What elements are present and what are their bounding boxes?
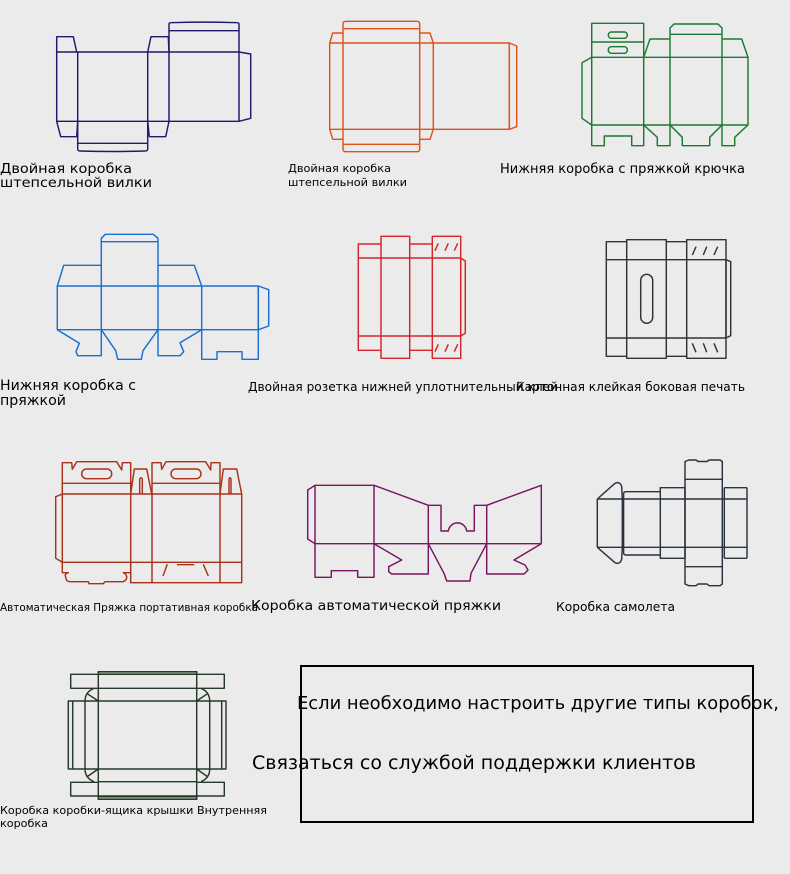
caption: lid-and-base box: Коробка коробки-ящика крышки Внутренняя [0,805,267,817]
caption: buckle bottom box: пряжкой [0,393,66,409]
diagram: orange double plug box [330,21,517,152]
contact message line 1: Если необходимо настроить другие типы коробок, [297,694,779,714]
caption: double plug box 2: Двойная коробка [288,162,391,175]
diagram: green hook buckle bottom box [582,23,748,146]
diagram: dark airplane box [597,460,747,586]
caption: double plug box 1: Двойная коробка [0,161,132,177]
caption: double plug box 1 [0,161,152,191]
caption: glued side seal box: Картонная клейкая боковая печать [516,379,745,394]
diagram: black glued side seal box [606,240,731,358]
caption: portable handle box: Автоматическая Пряжка портативная коробка [0,602,258,614]
diagram: brown portable handle box [56,462,242,584]
diagram: red double socket bottom sealed box [358,236,465,358]
caption: double plug box 1: штепсельной вилки [0,175,152,191]
caption: double plug box 2 [288,162,407,189]
caption: airplane box: Коробка самолета [556,600,675,614]
diagram: purple automatic buckle box [308,485,541,581]
contact frame [301,666,753,822]
caption: automatic buckle box: Коробка автоматической пряжки [251,598,501,614]
contact message line 2: Связаться со службой поддержки клиентов [252,753,696,774]
caption: double socket box: Двойная розетка нижней уплотнительный клей [248,379,558,394]
diagram: blue buckle bottom box [57,234,269,359]
caption: hook buckle box: Нижняя коробка с пряжкой крючка [500,162,745,177]
diagram: navy double plug box [57,22,251,151]
caption: buckle bottom box: Нижняя коробка с [0,378,136,394]
caption: lid-and-base box: коробка [0,818,48,830]
caption: double plug box 2: штепсельной вилки [288,176,407,189]
caption: lid-and-base box [0,805,267,830]
caption: buckle bottom box [0,378,136,409]
diagram: dark green lid-and-base box [68,672,226,799]
